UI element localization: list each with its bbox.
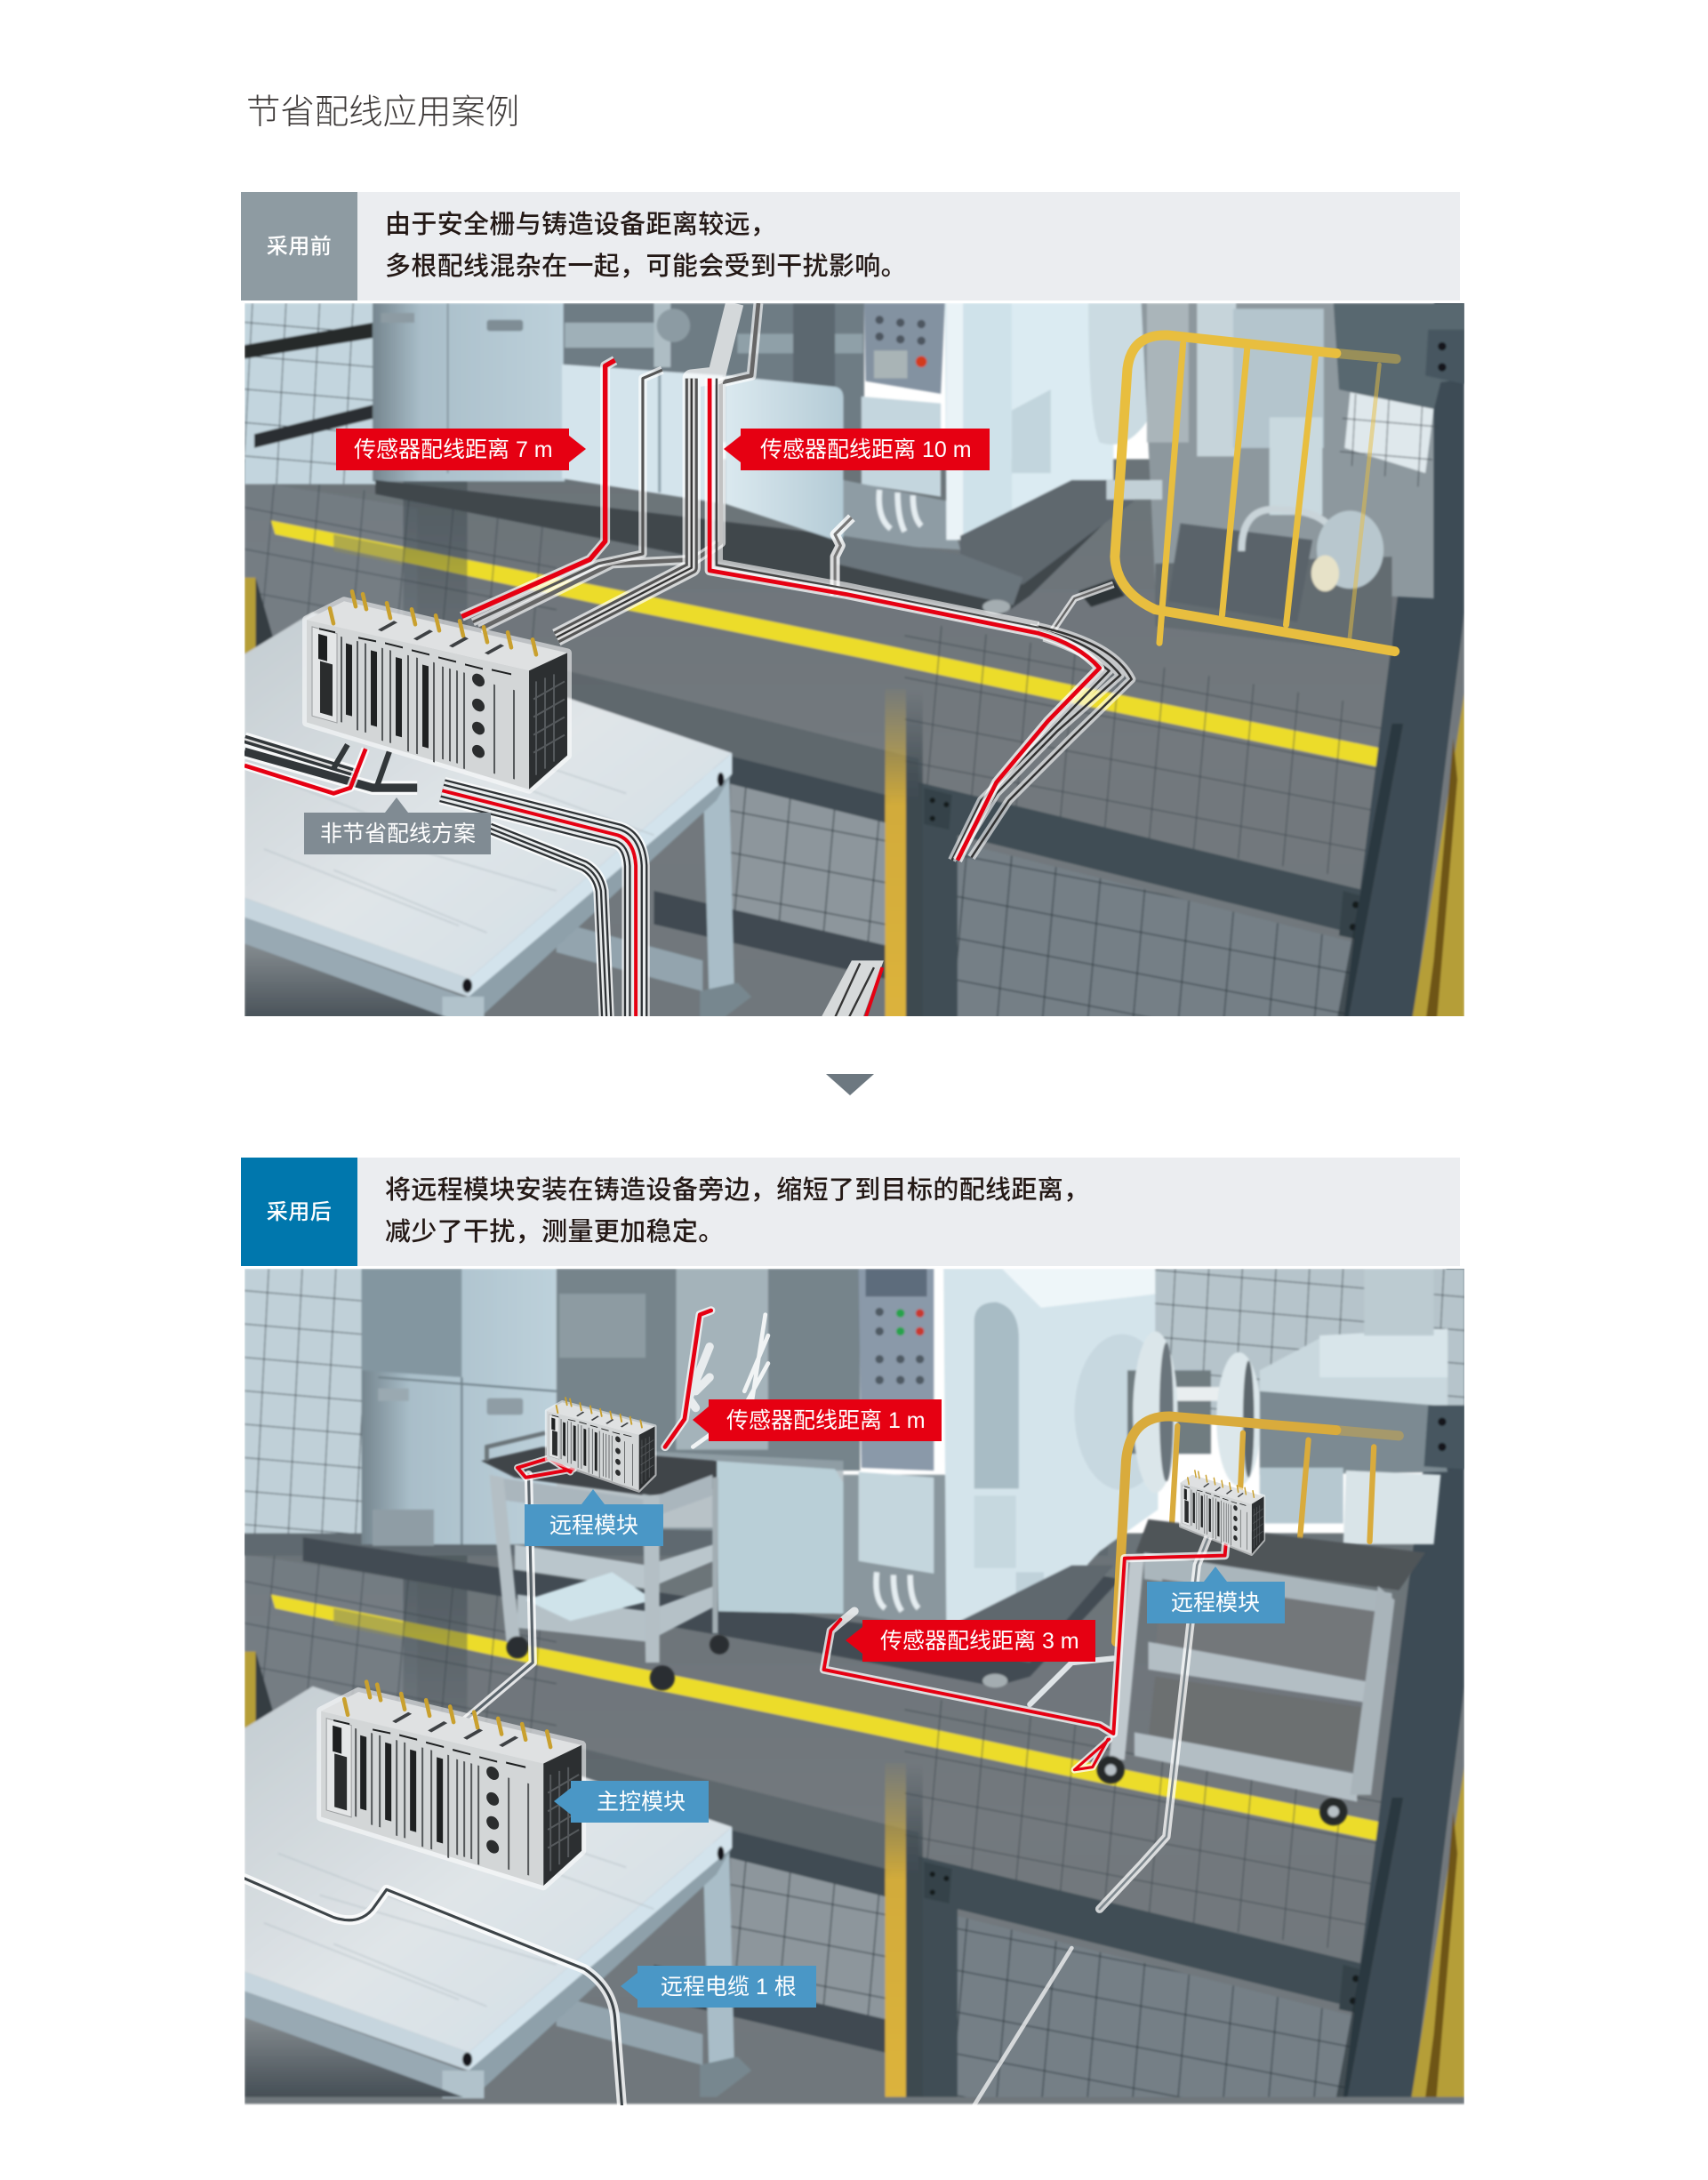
arrow: down xyxy=(826,1074,874,1095)
panel: after header xyxy=(241,1158,1460,1266)
illustration: after, factory scene with remote modules xyxy=(245,1269,1464,2105)
label: sensor wiring 7 m: 传感器配线距离 7 m xyxy=(354,437,553,462)
label: one remote cable: 远程电缆 1 根 xyxy=(661,1975,797,2000)
description: after xyxy=(385,1176,1089,1246)
description: before: 由于安全栅与铸造设备距离较远， xyxy=(385,211,776,239)
right cart xyxy=(1097,1519,1425,1825)
label: non wire-saving scheme: 非节省配线方案 xyxy=(320,822,476,846)
tag: after: 采用后 xyxy=(267,1200,332,1224)
label: sensor wiring 1 m: 传感器配线距离 1 m xyxy=(726,1408,926,1433)
label: sensor wiring 3 m: 传感器配线距离 3 m xyxy=(880,1629,1079,1654)
back wall and machine xyxy=(245,303,1464,654)
description: after: 减少了干扰，测量更加稳定。 xyxy=(385,1218,725,1246)
left cart xyxy=(481,1433,729,1690)
tag: after xyxy=(241,1158,357,1266)
back wall and machine xyxy=(245,1269,1464,1687)
label: one remote cable xyxy=(637,1966,816,2008)
description: before xyxy=(385,211,907,281)
module: remote on right cart xyxy=(1180,1471,1264,1554)
label: sensor wiring 10 m xyxy=(741,429,990,470)
label: remote module right: 远程模块 xyxy=(1171,1591,1260,1615)
label: sensor wiring 10 m: 传感器配线距离 10 m xyxy=(760,437,972,462)
module: main controller xyxy=(321,1682,581,1886)
wiring: long sensor cables xyxy=(245,303,1132,1018)
wiring: remote cable xyxy=(245,1310,1228,2105)
safety gate xyxy=(1115,335,1396,652)
panel: before header xyxy=(241,192,1460,301)
safety gate xyxy=(1116,1416,1399,1642)
controller module: before xyxy=(307,591,567,789)
label: sensor wiring 7 m xyxy=(336,429,569,470)
short sensor wires xyxy=(665,1310,711,1447)
tag: before: 采用前 xyxy=(267,235,332,259)
label: remote module left xyxy=(525,1504,663,1546)
module: remote on left cart xyxy=(547,1398,654,1490)
label: main module: 主控模块 xyxy=(597,1790,686,1815)
label: main module xyxy=(571,1781,709,1823)
label: non wire-saving scheme xyxy=(304,813,491,854)
label: sensor wiring 3 m xyxy=(862,1620,1095,1662)
description: after: 将远程模块安装在铸造设备旁边，缩短了到目标的配线距离， xyxy=(385,1176,1089,1205)
label: sensor wiring 1 m xyxy=(709,1399,942,1441)
tag: before xyxy=(241,192,357,301)
title: 节省配线应用案例 xyxy=(246,93,519,132)
illustration: before, factory scene with long wiring xyxy=(245,303,1464,1016)
table wiring xyxy=(245,739,417,788)
label: remote module right xyxy=(1147,1582,1285,1623)
label: remote module left: 远程模块 xyxy=(549,1513,638,1538)
description: before: 多根配线混杂在一起，可能会受到干扰影响。 xyxy=(385,252,907,281)
